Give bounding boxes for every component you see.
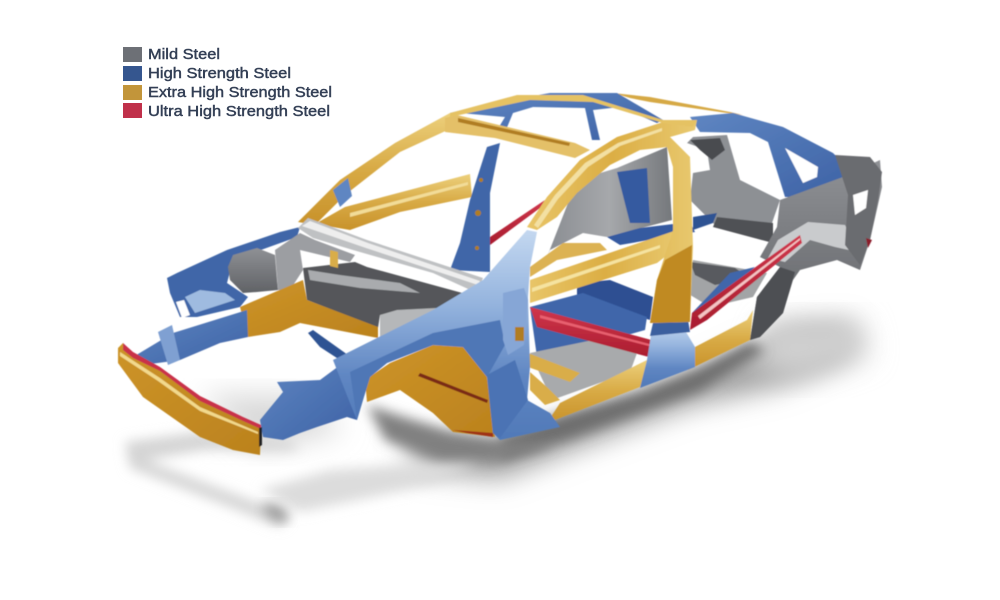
legend item: mild steel [123,46,220,63]
legend item: high strength steel: High Strength Steel [148,65,291,82]
rear floor dark beam [713,217,773,243]
far rail (blue) [133,310,248,365]
front door lower beam (gold) [530,230,680,303]
near sill gold [547,360,647,423]
red bar highlight [698,238,800,319]
rear seat inner grey [547,147,672,257]
fender arch highlight [768,222,858,262]
rear inner sheets (grey) [687,135,780,243]
roof rail top [450,95,697,127]
rear seat blue base [607,222,695,245]
near apron lower band [350,320,505,420]
far apron highlight [185,290,235,313]
rear floor grey [687,260,767,307]
hinge bolt [515,327,524,341]
near front rail (blue) [260,360,357,440]
near strut tower [380,308,437,338]
far frame rail (gold) [240,280,378,338]
tail red clip [866,238,872,248]
hinge plate [503,288,528,355]
rear end [835,155,882,265]
rear quarter (blue) [690,113,848,197]
bumper red strip [123,343,261,429]
far B-pillar (blue) [450,143,500,272]
far crash can bracket [158,325,180,365]
rear floor dark edge [690,262,750,285]
inner apron (blue) [308,330,348,360]
rear inner window cut [690,138,725,160]
floor cross member gold [528,353,580,382]
rear door red bar [690,235,802,330]
red side beam [530,307,677,360]
far B-pillar dots [475,178,483,250]
blue floor front [530,293,647,357]
rear door red beam stay blue [692,267,755,313]
bumper highlight [120,352,258,434]
bay cross brace [308,270,420,293]
front bumper beam (gold) [118,343,261,455]
gold strip seen through bay [330,250,338,268]
far shock plate [275,233,355,290]
front foot gold bracket [530,372,560,405]
roof blue panel [450,93,663,140]
far A-pillar lower blue patch [333,178,352,207]
legend item: ultra high strength steel: Ultra High Strength Steel [148,103,330,120]
near roof rail, A and B pillars (gold) [527,120,697,323]
ground shadow [125,320,870,527]
rear quarter panel (grey) [750,160,882,340]
legend [123,46,332,120]
inner gold beam [530,243,607,277]
car body structure [118,93,882,455]
quarter window [785,148,818,183]
A-pillar highlight [534,128,662,228]
rear sill gold [688,310,753,370]
far red bar [490,200,545,245]
header slot [458,118,570,146]
far roof rail [613,93,743,115]
pillar lower shade [487,360,528,438]
cowl (white-grey) [298,218,483,293]
far door beam (gold) [315,174,472,230]
rear seat blue block [617,168,650,223]
bumper end cap [259,427,262,447]
near A-pillar and hinge panel (light blue) [333,230,560,440]
engine bay firewall (dark grey) [303,262,477,328]
rear floor blue strip [693,213,717,230]
cowl highlight [302,221,480,285]
near wheelhouse (gold) [365,345,495,437]
far rail opening [176,300,190,318]
B-pillar base (blue) [640,323,695,388]
far A-pillar (gold) [298,113,452,225]
legend item: extra high strength steel: Extra High Strength Steel [148,84,332,101]
front header (gold) [445,115,590,158]
side beam highlight [540,315,672,352]
grey floor [530,340,640,400]
far wheelhouse (blue) [167,227,300,317]
wheelhouse crease [418,373,488,403]
far door beam stripe [350,182,468,217]
B-pillar shade [650,245,692,323]
legend item: mild steel: Mild Steel [148,46,220,63]
far strut tower (dark grey) [228,248,278,293]
B-pillar base dark band [650,320,690,336]
blue floor rear [577,280,653,320]
rear end openings [853,190,868,215]
rear wheel arch inner [750,267,795,340]
beam highlight [532,245,660,292]
wheelhouse bottom red edge [453,430,493,437]
